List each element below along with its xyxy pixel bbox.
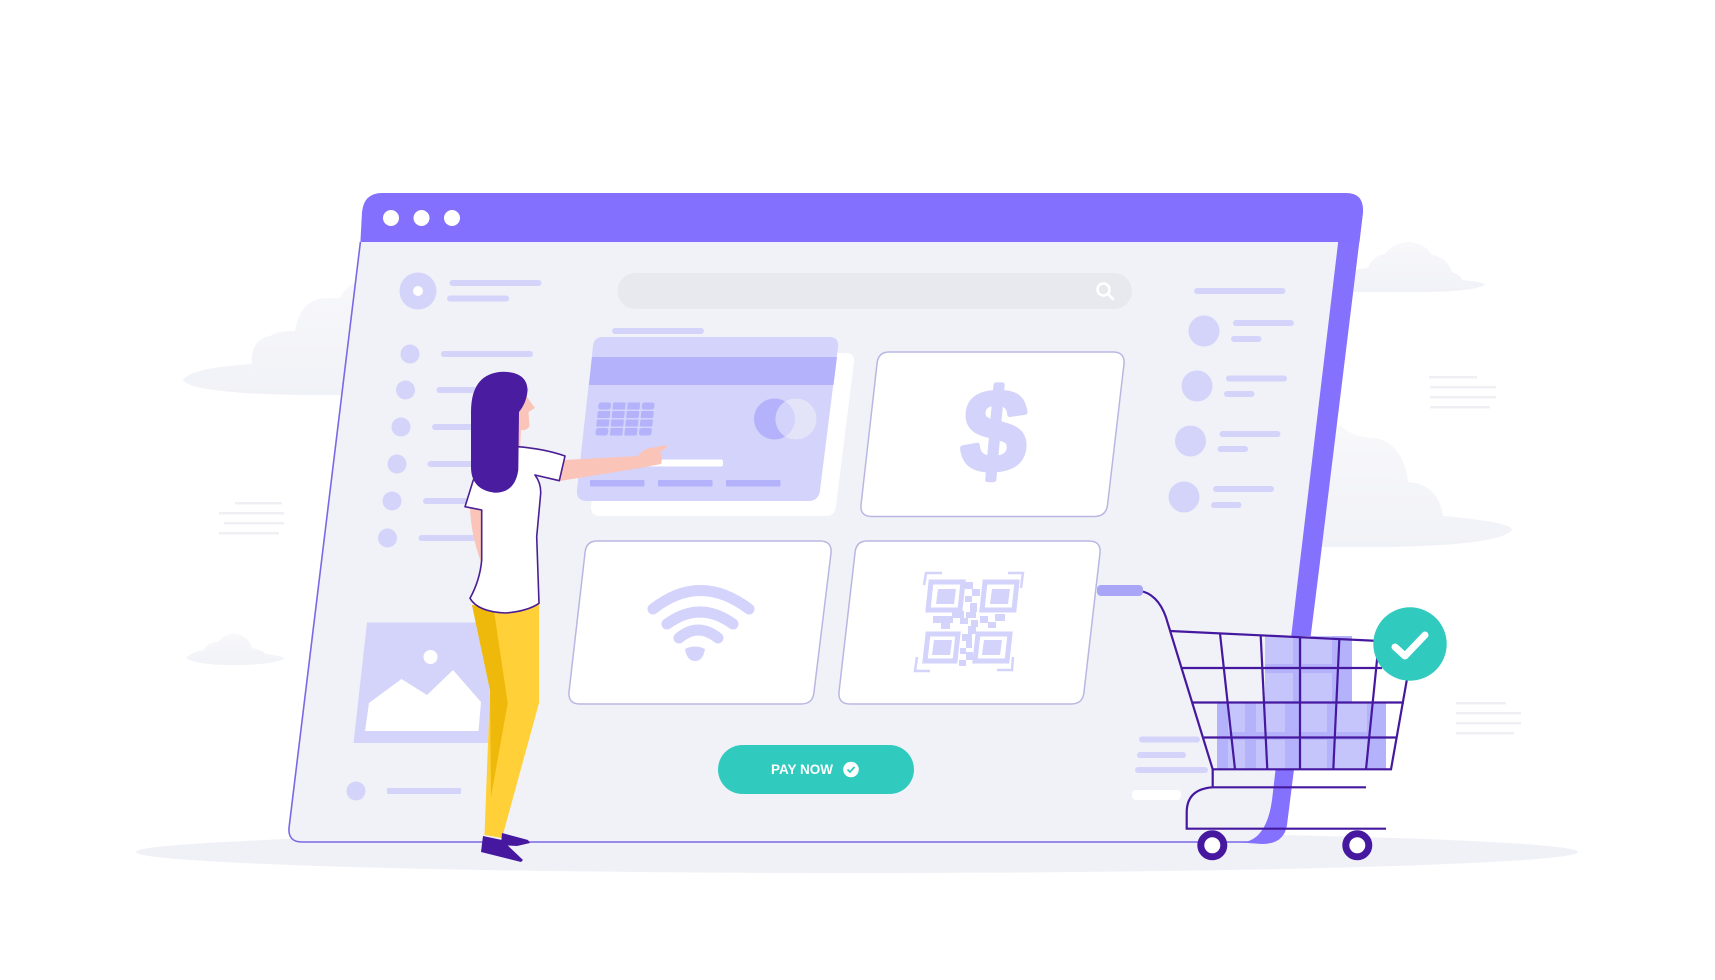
ground shadow [136,831,1578,873]
option card: dollar [861,352,1124,516]
card small bars [590,480,780,486]
card stripe [589,357,837,385]
shopping cart [1097,585,1447,857]
cloud: right top [1350,242,1485,292]
front arm [560,445,667,481]
pay now button [718,745,914,794]
cart frame [1143,592,1413,829]
lower boxes [1217,703,1386,769]
window right edge [1240,200,1363,844]
cloud: right lower [1310,425,1512,547]
woman [465,372,667,862]
card chip [595,402,655,436]
cart handle [1097,585,1143,596]
icon: QR code [915,573,1023,671]
icon: magnifier [1098,284,1113,299]
wifi dot [685,646,705,661]
card logo [754,398,816,440]
image placeholder [354,622,492,743]
browser window [289,193,1363,844]
icon: wifi [653,590,749,638]
trousers [472,601,539,838]
option card: credit card [577,337,854,516]
cart wheels [1201,834,1369,857]
option card: wifi [569,541,831,704]
hair [471,372,528,493]
heading line above card [612,328,704,334]
window body [289,242,1339,842]
window buttons [383,210,460,226]
cloud: left large [183,278,420,395]
bottom left item [346,782,461,800]
text lines: right top [1429,376,1496,408]
side text lines [1132,736,1208,800]
check badge [1373,607,1447,681]
shoes [481,833,530,862]
card number line [595,460,723,466]
card face [577,337,838,501]
card backing [591,353,854,516]
dollar sign: $ [957,366,1033,496]
search bar [618,273,1132,309]
window title bar [360,193,1363,242]
cloud: left small [186,634,284,665]
pay now button: PAY NOW [771,762,833,777]
text lines: right bottom [1456,702,1521,734]
window outline [289,242,1255,842]
icon: check badge [843,762,859,777]
text lines: left [219,502,284,534]
left sidebar list [378,344,533,548]
cart contents [1217,636,1386,769]
upper box [1265,636,1352,703]
logo header [400,272,542,310]
option card: QR code [839,541,1100,704]
shirt [465,447,565,613]
face [512,395,535,450]
back arm [470,508,482,562]
right sidebar list [1168,288,1294,512]
